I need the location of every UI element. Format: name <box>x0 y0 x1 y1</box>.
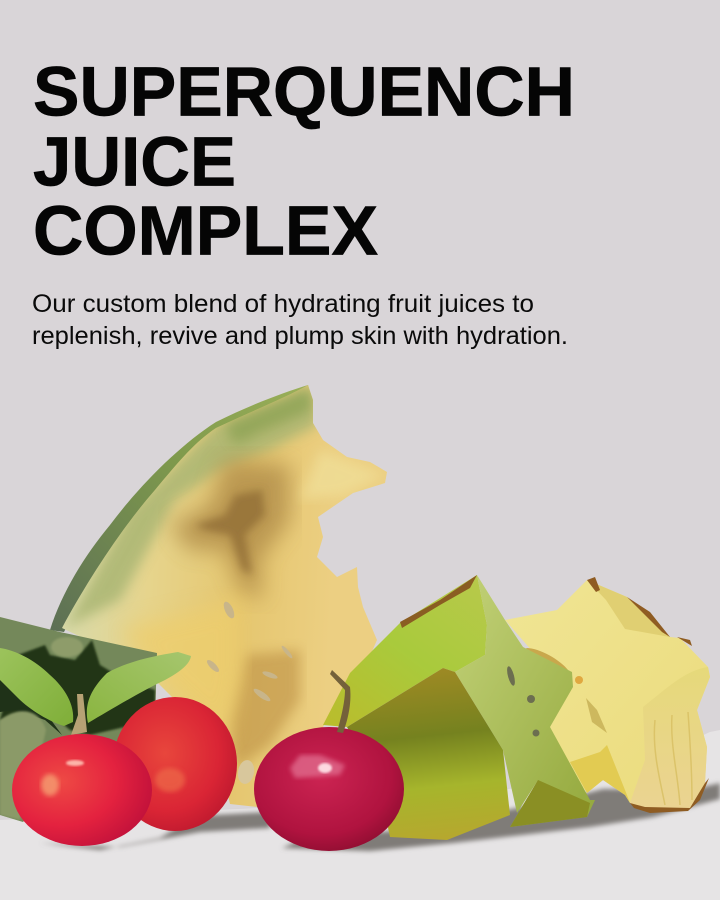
back lobe burnt edge <box>400 575 477 628</box>
golden flesh <box>122 612 244 722</box>
right leaf <box>87 652 191 723</box>
stem <box>71 694 87 735</box>
caramel bruise glow <box>170 460 290 600</box>
title: JUICE <box>33 122 236 200</box>
acerola cherry front <box>12 734 152 846</box>
title: SUPERQUENCH <box>33 52 575 130</box>
seeds <box>205 600 294 785</box>
floor shadows <box>40 783 720 851</box>
core and pockets <box>526 648 568 670</box>
description text: Our custom blend of hydrating fruit juices to <box>32 290 534 318</box>
right side flesh <box>630 667 710 812</box>
title: COMPLEX <box>33 192 378 270</box>
description text: replenish, revive and plump skin with hydration. <box>32 322 568 350</box>
back lobe <box>323 575 487 727</box>
description text <box>32 290 568 350</box>
seeds <box>506 666 540 736</box>
floor surface <box>0 730 720 900</box>
leaves <box>0 648 191 735</box>
acerola cherry back <box>113 697 237 831</box>
side flesh fibres <box>654 712 692 805</box>
burnt edges <box>587 577 709 813</box>
front lobe <box>347 668 510 840</box>
green flesh near the rind <box>65 385 318 628</box>
left leaf <box>0 648 73 726</box>
flesh <box>62 385 387 807</box>
back star fruit <box>505 577 710 813</box>
upper right bright flesh <box>301 452 374 500</box>
caramel bruise core <box>195 490 265 575</box>
star fruit body <box>505 580 710 812</box>
title <box>33 52 575 270</box>
front star fruit <box>323 575 595 840</box>
watermelon slice <box>50 380 400 820</box>
lower bruise <box>230 650 300 770</box>
upper green tip <box>225 388 312 445</box>
lower right facet <box>510 780 590 827</box>
star face <box>455 575 595 827</box>
upper lobe side <box>587 580 670 637</box>
watermelon rind chunk <box>0 610 160 825</box>
dark stripes <box>0 640 155 735</box>
acerola cherry with stem <box>254 670 404 851</box>
pale patches <box>51 637 83 657</box>
rind <box>50 385 312 632</box>
lower shaded facet <box>570 745 630 803</box>
